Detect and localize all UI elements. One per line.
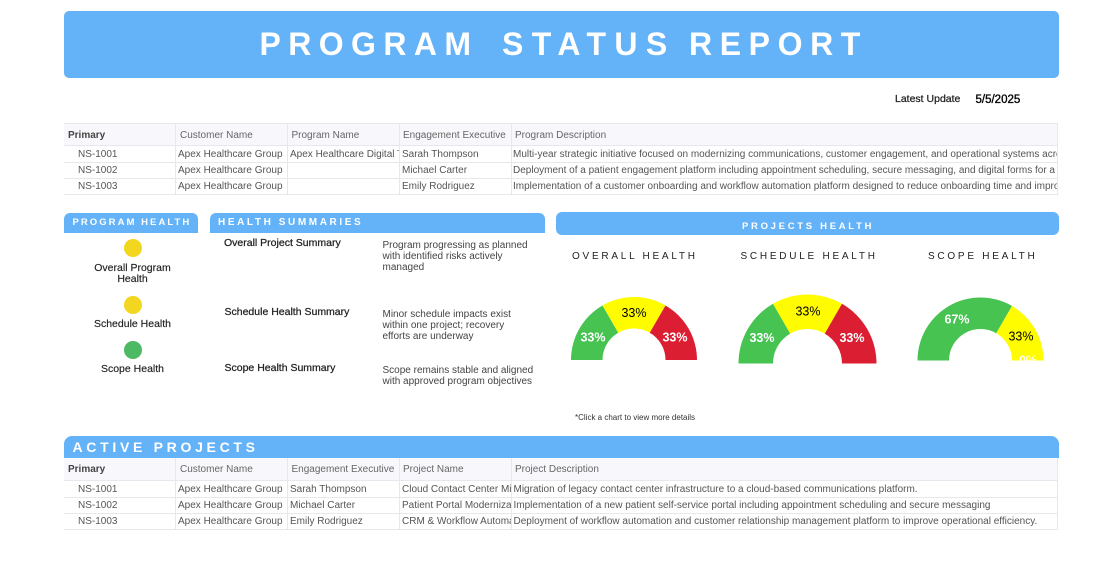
label: scope health: Scope Health	[101, 363, 164, 375]
latest update label: Latest Update	[895, 93, 960, 105]
table: active projects	[64, 458, 1058, 530]
programs header row: Program Description	[515, 130, 606, 141]
summary text: overall	[382, 240, 528, 273]
panel heading: health summaries: HEALTH SUMMARIES	[218, 217, 363, 228]
gauge segment: yellow 33%: 33%	[795, 304, 821, 318]
summary text: schedule: efforts are underway	[382, 331, 473, 342]
active projects row NS-1001	[78, 484, 918, 495]
active projects row NS-1002: Michael Carter	[290, 500, 355, 511]
status dot: scope health	[124, 341, 142, 359]
summary text: scope	[382, 364, 533, 387]
title banner	[64, 11, 1059, 78]
active projects row NS-1002: Apex Healthcare Group	[178, 500, 283, 511]
programs row NS-1002: Apex Healthcare Group	[178, 165, 283, 176]
summary text: overall: Program progressing as planned	[382, 240, 528, 251]
panel heading: projects health: PROJECTS HEALTH	[742, 221, 874, 232]
programs row NS-1002: Michael Carter	[402, 165, 467, 176]
label: schedule health: Schedule Health	[94, 318, 171, 330]
summary text: scope: with approved program objectives	[382, 376, 532, 387]
panel: health summaries text	[224, 237, 533, 387]
programs header row	[64, 124, 1058, 145]
panel: program health indicators	[94, 239, 171, 375]
active projects header row: Primary	[68, 464, 105, 475]
summary text: scope: Scope remains stable and aligned	[382, 364, 533, 376]
programs row NS-1003: NS-1003	[78, 181, 117, 192]
active projects header row: Customer Name	[180, 464, 253, 475]
programs row NS-1002	[78, 165, 1057, 176]
programs row NS-1001: Sarah Thompson	[402, 149, 479, 160]
gauge segment: red 33%: 33%	[839, 331, 865, 345]
section heading: active projects	[64, 436, 1059, 458]
active projects row NS-1001: NS-1001	[78, 484, 117, 495]
active projects header row: Project Description	[515, 464, 599, 475]
label: overall program health: Overall Program	[94, 262, 171, 274]
panel heading: health summaries	[210, 212, 545, 233]
title word: PROGRAM: PROGRAM	[260, 26, 478, 62]
active projects row NS-1002: NS-1002	[78, 500, 117, 511]
active projects row NS-1003	[78, 516, 1037, 527]
programs header row: Engagement Executive	[403, 130, 506, 141]
footnote: *Click a chart to view more details	[575, 413, 695, 422]
programs row NS-1003: Apex Healthcare Group	[178, 181, 283, 192]
active projects row NS-1003: NS-1003	[78, 516, 117, 527]
label: overall program health: Health	[117, 273, 148, 285]
title word: REPORT: REPORT	[689, 26, 868, 62]
chart heading: scope health: SCOPE HEALTH	[928, 250, 1038, 262]
panel heading: program health	[64, 212, 198, 233]
active projects row NS-1001: Migration of legacy contact center infrastructure to a cloud-based communications platform.	[514, 484, 918, 495]
programs row NS-1001	[78, 149, 1057, 160]
gauge segment: green 33%: 33%	[749, 331, 775, 345]
latest update date: 5/5/2025	[976, 94, 1020, 106]
summary text: overall: with identified risks actively	[382, 251, 503, 262]
section heading: active projects: ACTIVE PROJECTS	[72, 439, 259, 455]
summary heading: overall: Overall Project Summary	[224, 237, 341, 249]
summary text: schedule	[382, 309, 511, 342]
panel heading: program health: PROGRAM HEALTH	[72, 216, 191, 228]
active projects row NS-1002: Implementation of a new patient self-service portal including appointment scheduling and secure messaging	[514, 500, 990, 511]
gauge segment: red 33%: 33%	[662, 330, 688, 344]
summary heading: scope: Scope Health Summary	[224, 362, 335, 374]
active projects header row: Project Name	[403, 464, 464, 475]
active projects row NS-1003: Deployment of workflow automation and customer relationship management platform to improve operational efficiency.	[514, 516, 1037, 527]
programs row NS-1002: NS-1002	[78, 165, 117, 176]
label: overall program health	[94, 262, 171, 285]
active projects row NS-1003: Emily Rodriguez	[290, 516, 363, 527]
gauge chart: scope health	[918, 298, 1044, 360]
active projects row NS-1001: Apex Healthcare Group	[178, 484, 283, 495]
gauge segment: green 67%: 67%	[944, 312, 970, 326]
summary text: overall: managed	[382, 262, 424, 273]
active projects header row	[64, 459, 1058, 480]
active projects row NS-1002	[78, 500, 990, 511]
gauge segment: yellow 33%: 33%	[621, 306, 647, 320]
status dot: overall program health	[124, 239, 142, 257]
chart heading: overall health: OVERALL HEALTH	[572, 250, 698, 262]
programs row NS-1001: NS-1001	[78, 149, 117, 160]
programs header row: Customer Name	[180, 130, 253, 141]
status dot: schedule health	[124, 296, 142, 314]
active projects row NS-1003: Apex Healthcare Group	[178, 516, 283, 527]
programs row NS-1003	[78, 181, 1057, 192]
programs header row: Program Name	[292, 130, 359, 141]
gauge segment: yellow 33%: 33%	[1008, 330, 1034, 344]
programs row NS-1003: Emily Rodriguez	[402, 181, 475, 192]
panel heading: projects health	[556, 212, 1059, 235]
table: programs	[64, 123, 1058, 195]
title word: STATUS: STATUS	[502, 26, 676, 62]
programs row NS-1001: Apex Healthcare Group	[178, 149, 283, 160]
summary heading: schedule: Schedule Health Summary	[224, 306, 349, 318]
programs header row: Primary	[68, 130, 105, 141]
chart heading: schedule health: SCHEDULE HEALTH	[740, 250, 878, 262]
summary text: schedule: Minor schedule impacts exist	[382, 309, 511, 320]
summary text: schedule: within one project; recovery	[382, 320, 504, 331]
active projects row NS-1001: Sarah Thompson	[290, 484, 367, 495]
active projects header row: Engagement Executive	[292, 464, 394, 475]
gauge label: red 0%: 0%	[1019, 354, 1037, 368]
gauge segment: green 33%: 33%	[580, 330, 606, 344]
